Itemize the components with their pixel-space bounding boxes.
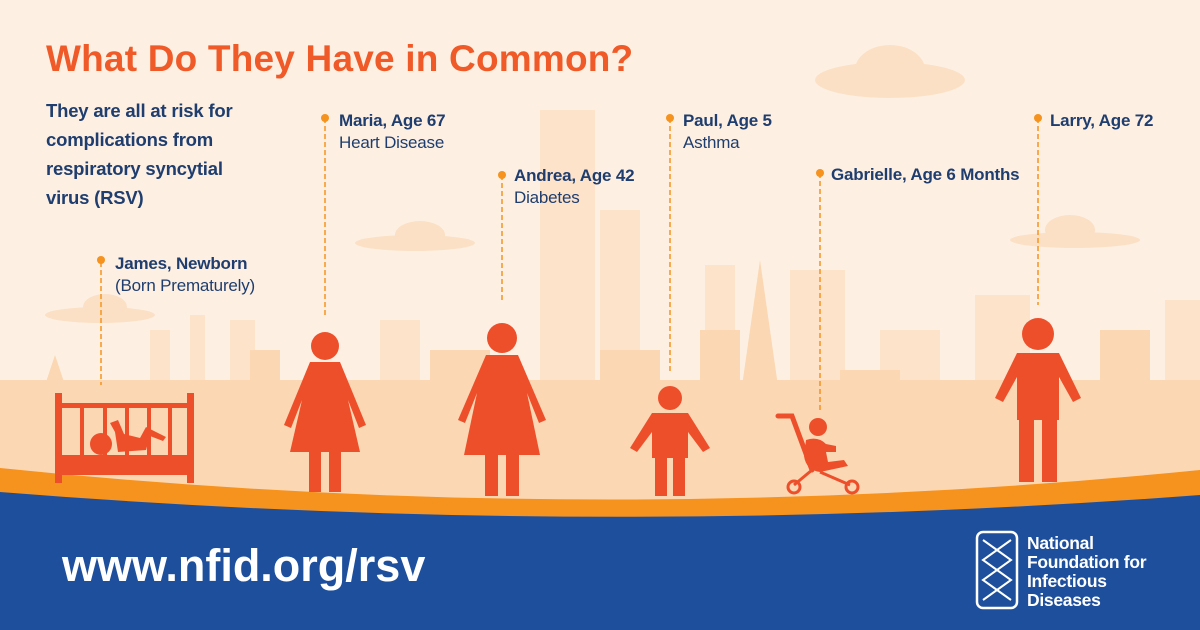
title: What Do They Have in Common? <box>46 38 633 79</box>
clouds <box>45 45 1140 323</box>
icon: Maria <box>284 332 366 492</box>
label: Paul <box>683 111 772 152</box>
skyline far <box>150 110 1200 510</box>
label: Gabrielle: Gabrielle, Age 6 Months <box>831 165 1019 184</box>
logo: NFID: Diseases <box>1027 590 1100 610</box>
icon: crib with baby <box>55 393 194 483</box>
icon: Andrea <box>458 323 546 496</box>
dashed leaders <box>97 114 1042 410</box>
label: Paul: Paul, Age 5 <box>683 111 772 130</box>
label: Larry: Larry, Age 72 <box>1050 111 1153 130</box>
icon: Paul <box>630 386 710 496</box>
label: Andrea: Andrea, Age 42 <box>514 166 634 185</box>
label: Maria: Maria, Age 67 <box>339 111 445 130</box>
orange ground <box>0 468 1200 630</box>
label: James: James, Newborn <box>115 254 247 273</box>
label: Maria <box>339 111 445 152</box>
icon: Larry <box>995 318 1081 482</box>
subtitle: They are all at risk for complications from respiratory syncytial virus (RSV) <box>46 100 232 208</box>
logo: NFID: Infectious <box>1027 571 1107 591</box>
label: Andrea: Diabetes <box>514 188 580 207</box>
logo: NFID: Foundation for <box>1027 552 1146 572</box>
logo: NFID <box>976 530 1146 610</box>
label: Paul: Asthma <box>683 133 739 152</box>
label: James <box>115 254 255 295</box>
label: James: (Born Prematurely) <box>115 276 255 295</box>
icon: stroller with baby <box>778 416 858 493</box>
label: Andrea <box>514 166 634 207</box>
label: Maria: Heart Disease <box>339 133 444 152</box>
url: www.nfid.org/rsv <box>62 540 425 591</box>
blue band <box>0 492 1200 630</box>
logo: NFID: National <box>1027 533 1094 553</box>
